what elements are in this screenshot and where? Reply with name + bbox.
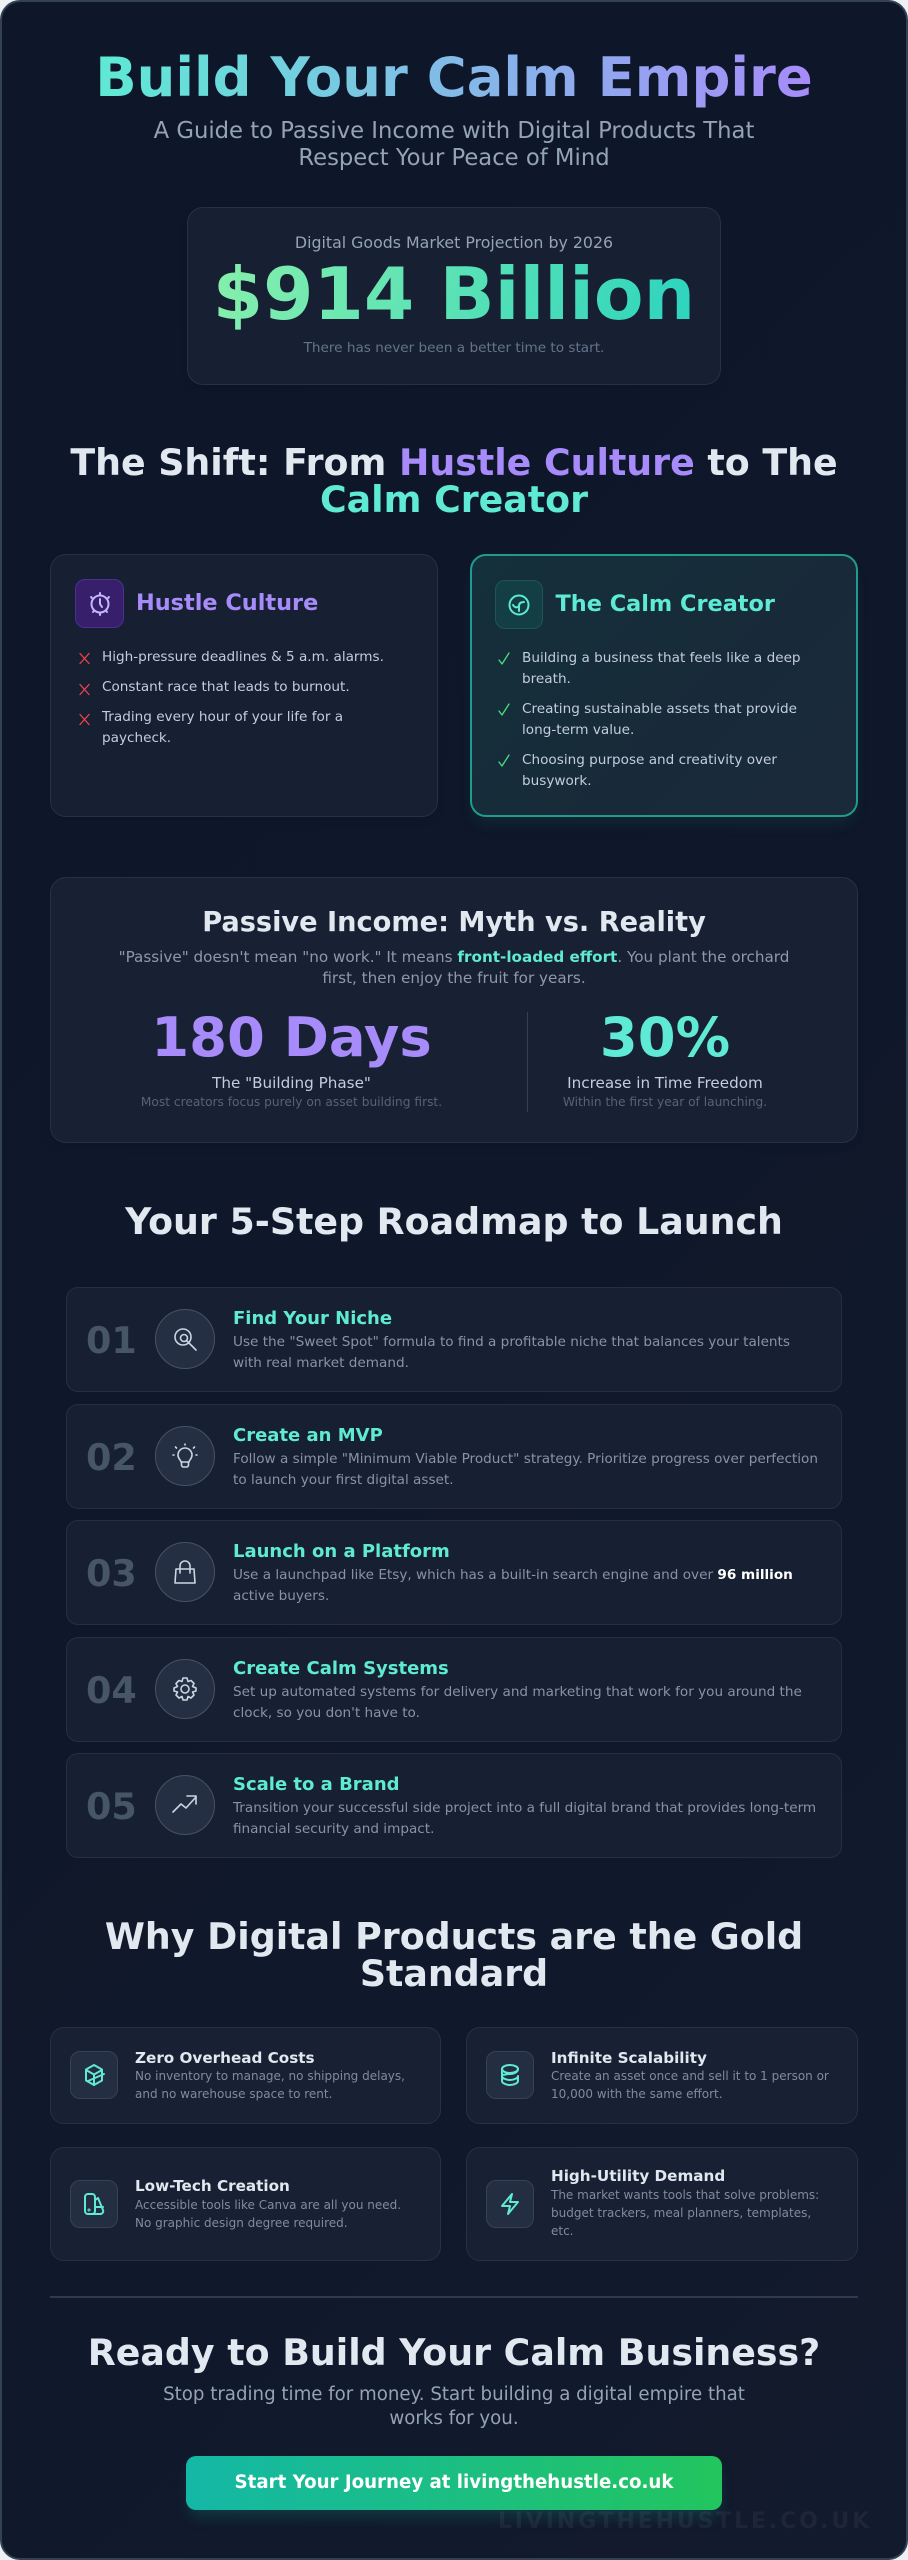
icon: lightning bolt: [486, 2180, 534, 2228]
step title: Launch on a Platform: [233, 1541, 450, 1562]
benefit: low-tech creation: [50, 2147, 441, 2261]
stat: 180 days: The "Building Phase": [212, 1074, 371, 1092]
panel heading: Passive Income: Myth vs. Reality: [202, 907, 706, 938]
item 3: [522, 752, 777, 789]
heading: roadmap: Your 5-Step Roadmap to Launch: [125, 1200, 783, 1243]
item 3: paycheck.: [102, 730, 171, 746]
step title: Scale to a Brand: [233, 1774, 400, 1795]
text: [135, 2198, 401, 2230]
cross mark 1: [79, 652, 90, 664]
text: and no warehouse space to rent.: [135, 2087, 332, 2101]
check mark 3: [498, 754, 510, 767]
icon: swatches: [70, 2180, 118, 2228]
cta text: [163, 2384, 745, 2429]
check mark 1: [498, 652, 510, 665]
title: Build Your Calm Empire: [95, 46, 813, 109]
benefit: zero overhead: [50, 2027, 441, 2124]
card title: Hustle Culture: [136, 590, 318, 616]
step text: financial security and impact.: [233, 1820, 434, 1836]
text: etc.: [551, 2224, 574, 2238]
step text: [233, 1450, 818, 1488]
list: hustle items: [79, 649, 384, 746]
step text: [233, 1566, 793, 1604]
panel body: "Passive" doesn't mean "no work." It means front-loaded effort. You plant the orchard: [119, 948, 789, 966]
cta button: Start Your Journey at livingthehustle.co.uk: [235, 2472, 673, 2493]
item 2: [522, 701, 797, 738]
item 3: Trading every hour of your life for a: [102, 709, 343, 725]
number: 04: [86, 1668, 137, 1712]
step text: Follow a simple "Minimum Viable Product" strategy. Prioritize progress over perfection: [233, 1450, 818, 1466]
stat: 180 days: Most creators focus purely on asset building first.: [141, 1095, 442, 1109]
item 2: long-term value.: [522, 722, 634, 738]
text: No graphic design degree required.: [135, 2216, 348, 2230]
icon: light bulb: [155, 1426, 215, 1486]
step text: Set up automated systems for delivery and marketing that work for you around the: [233, 1684, 802, 1700]
title: Zero Overhead Costs: [135, 2048, 315, 2066]
step 5: [66, 1753, 842, 1858]
step text: [233, 1684, 802, 1720]
stat label: Digital Goods Market Projection by 2026: [295, 233, 613, 252]
number: 05: [86, 1784, 137, 1828]
text: Create an asset once and sell it to 1 person or: [551, 2069, 829, 2083]
list: calm items: [498, 650, 801, 789]
cta text: Stop trading time for money. Start building a digital empire that: [163, 2384, 745, 2405]
stat: 30 percent: [563, 1006, 767, 1109]
step text: clock, so you don't have to.: [233, 1704, 420, 1720]
subtitle: Respect Your Peace of Mind: [298, 145, 610, 171]
item 1: High-pressure deadlines & 5 a.m. alarms.: [102, 649, 384, 665]
item 3: busywork.: [522, 773, 592, 789]
heading: the shift: The Shift: From Hustle Culture to The: [70, 441, 838, 484]
cta button: [186, 2456, 722, 2510]
step text: Use a launchpad like Etsy, which has a built-in search engine and over 96 million: [233, 1566, 793, 1582]
heading: the shift: [70, 441, 838, 521]
title: Low-Tech Creation: [135, 2177, 290, 2195]
item 1: breath.: [522, 671, 571, 687]
number: 02: [86, 1436, 137, 1478]
text: [135, 2069, 405, 2101]
cross mark 2: [79, 684, 90, 696]
watermark: LIVINGTHEHUSTLE.CO.UK: [498, 2509, 872, 2534]
stat: 30 percent: 30%: [600, 1006, 730, 1069]
heading: gold standard: [105, 1915, 803, 1995]
item 3: [102, 709, 343, 746]
stat: 30 percent: Increase in Time Freedom: [567, 1074, 763, 1092]
step 4: [66, 1637, 842, 1742]
step title: Create an MVP: [233, 1425, 383, 1446]
step text: [233, 1334, 790, 1370]
check mark 2: [498, 703, 510, 716]
subtitle: [154, 118, 754, 171]
title: Infinite Scalability: [551, 2048, 707, 2066]
text: [551, 2069, 829, 2101]
number: 03: [86, 1552, 137, 1594]
card title: The Calm Creator: [556, 591, 775, 617]
step text: Transition your successful side project into a full digital brand that provides long-term: [233, 1800, 816, 1816]
stat: 180 days: 180 Days: [151, 1006, 432, 1069]
title: High-Utility Demand: [551, 2167, 725, 2185]
text: [550, 2188, 819, 2238]
step text: active buyers.: [233, 1588, 329, 1604]
step text: Use the "Sweet Spot" formula to find a profitable niche that balances your talents: [233, 1334, 790, 1350]
heading: the shift: Calm Creator: [320, 478, 588, 521]
subtitle: A Guide to Passive Income with Digital Products That: [154, 118, 754, 144]
step title: Find Your Niche: [233, 1308, 392, 1329]
heading: gold standard: Standard: [360, 1952, 548, 1995]
step title: Create Calm Systems: [233, 1658, 449, 1679]
heading: call to action: Ready to Build Your Calm Business?: [88, 2331, 820, 2374]
icon: gear: [155, 1659, 215, 1719]
icon: coin stack: [486, 2051, 534, 2099]
step 2: [66, 1404, 842, 1509]
icon: box: [70, 2051, 118, 2099]
cross mark 3: [79, 714, 90, 726]
step 3: [66, 1520, 842, 1625]
icon: stressed clock: [75, 579, 124, 628]
cta text: works for you.: [389, 2408, 519, 2429]
item 3: Choosing purpose and creativity over: [522, 752, 777, 768]
item 1: Building a business that feels like a deep: [522, 650, 801, 666]
number: 01: [86, 1318, 137, 1362]
step text: with real market demand.: [233, 1354, 409, 1370]
panel body: first, then enjoy the fruit for years.: [322, 968, 586, 986]
panel: hustle culture: [50, 554, 438, 817]
icon: trending up: [155, 1775, 215, 1835]
item 1: [522, 650, 801, 687]
panel: myth vs reality: [50, 877, 858, 1143]
stat: 180 days: [141, 1006, 442, 1109]
stat card: market projection: [187, 207, 721, 385]
panel body: [119, 948, 789, 986]
heading: gold standard: Why Digital Products are the Gold: [105, 1915, 803, 1958]
item 2: Creating sustainable assets that provide: [522, 701, 797, 717]
stat value: $914 Billion: [213, 253, 695, 337]
step text: [232, 1800, 816, 1836]
text: 10,000 with the same effort.: [551, 2087, 723, 2101]
text: No inventory to manage, no shipping delays,: [135, 2069, 405, 2083]
icon: search: [155, 1309, 215, 1369]
step text: to launch your first digital asset.: [233, 1472, 454, 1488]
panel: the calm creator: [470, 554, 858, 817]
icon: shopping bag: [155, 1542, 215, 1602]
benefit: high-utility demand: [466, 2147, 858, 2261]
benefit: infinite scalability: [466, 2027, 858, 2124]
stat note: There has never been a better time to start.: [304, 340, 604, 356]
stat: 30 percent: Within the first year of launching.: [563, 1095, 767, 1109]
text: budget trackers, meal planners, templates,: [551, 2206, 811, 2220]
icon: calm face: [495, 580, 543, 629]
step 1: [66, 1287, 842, 1392]
text: The market wants tools that solve problems:: [551, 2188, 819, 2202]
text: Accessible tools like Canva are all you need.: [135, 2198, 401, 2212]
item 2: Constant race that leads to burnout.: [102, 679, 350, 695]
